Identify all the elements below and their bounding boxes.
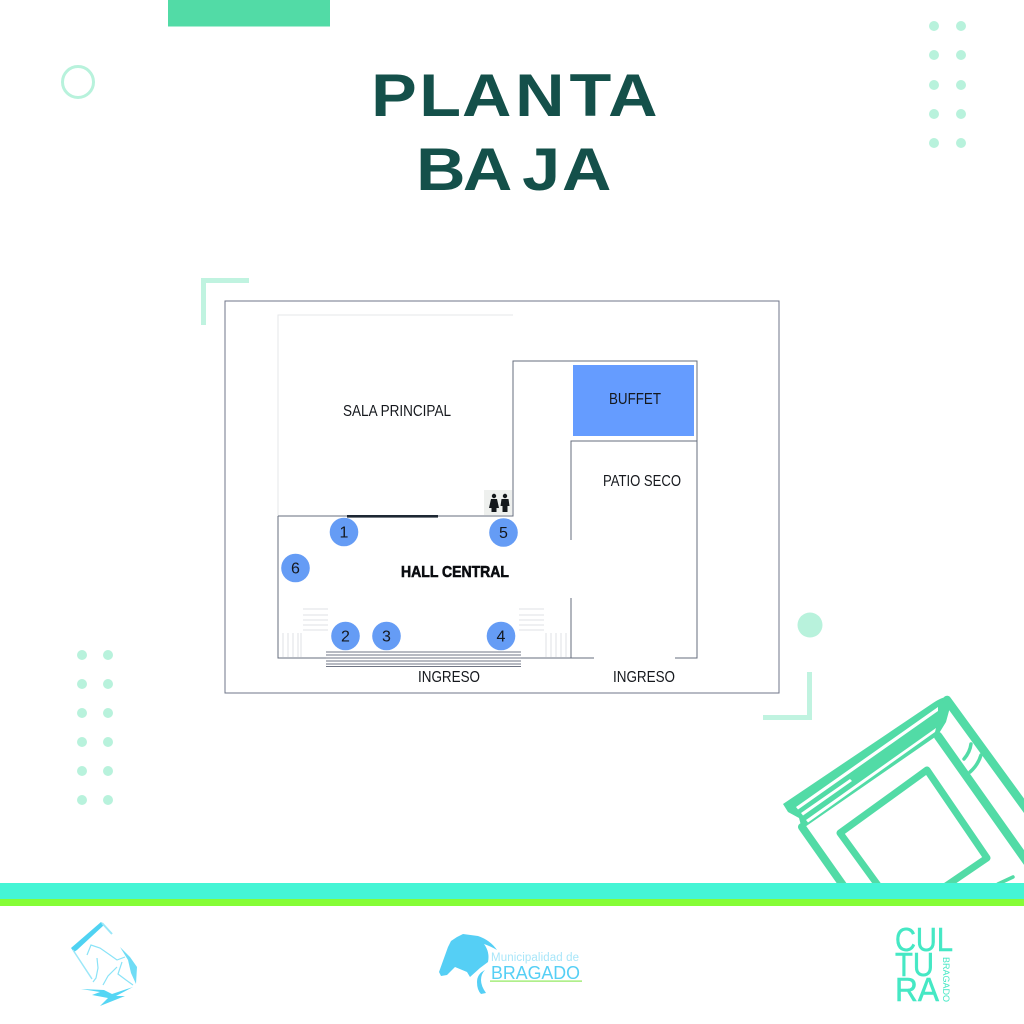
title: PLANTA [371, 62, 657, 129]
logo: cultura bragado: BRAGADO [940, 957, 951, 1002]
walls [278, 361, 697, 658]
door [347, 515, 438, 518]
decorative corner bracket top left [201, 278, 249, 325]
entrance steps [326, 652, 521, 666]
numbered markers: 3 [382, 628, 391, 646]
room: patio seco [571, 441, 697, 658]
room: buffet [573, 365, 694, 436]
logo: municipalidad de bragado [439, 934, 582, 994]
plan frame [225, 301, 779, 693]
numbered markers: 6 [291, 560, 300, 578]
decorative dots top right [929, 21, 966, 148]
logo: municipalidad de bragado: Municipalidad de [491, 952, 579, 964]
label: ingreso patio: INGRESO [613, 669, 675, 686]
decorative ring [62, 66, 94, 98]
numbered markers: 2 [341, 628, 350, 646]
title: BAJA [416, 136, 611, 203]
logo: horse and book [71, 922, 137, 1006]
room: patio seco: PATIO SECO [603, 473, 681, 490]
room: sala principal: SALA PRINCIPAL [343, 403, 451, 420]
label: ingreso main: INGRESO [418, 669, 480, 686]
room: sala principal [278, 315, 513, 516]
icon: restrooms [484, 490, 512, 515]
numbered markers: 1 [340, 524, 349, 542]
numbered markers: 5 [499, 525, 508, 542]
floor plan [225, 301, 779, 693]
logo: municipalidad de bragado: BRAGADO [491, 962, 580, 983]
icon: book illustration [783, 697, 1024, 890]
decorative corner bracket bottom right [763, 672, 812, 720]
decorative dots left [77, 650, 113, 805]
logo: cultura bragado [895, 921, 953, 1008]
logo: cultura bragado: TU [895, 946, 934, 983]
numbered markers: 4 [497, 628, 506, 646]
footer band [0, 883, 1024, 906]
logo: cultura bragado: CUL [895, 921, 953, 958]
stairs details [283, 609, 566, 657]
numbered markers [281, 518, 518, 650]
label: hall central: HALL CENTRAL [401, 564, 509, 581]
room: buffet: BUFFET [609, 391, 661, 408]
title [371, 62, 657, 203]
logo: cultura bragado: RA [895, 971, 939, 1008]
decorative top bar [168, 0, 330, 26]
decorative solid circle [798, 612, 822, 638]
